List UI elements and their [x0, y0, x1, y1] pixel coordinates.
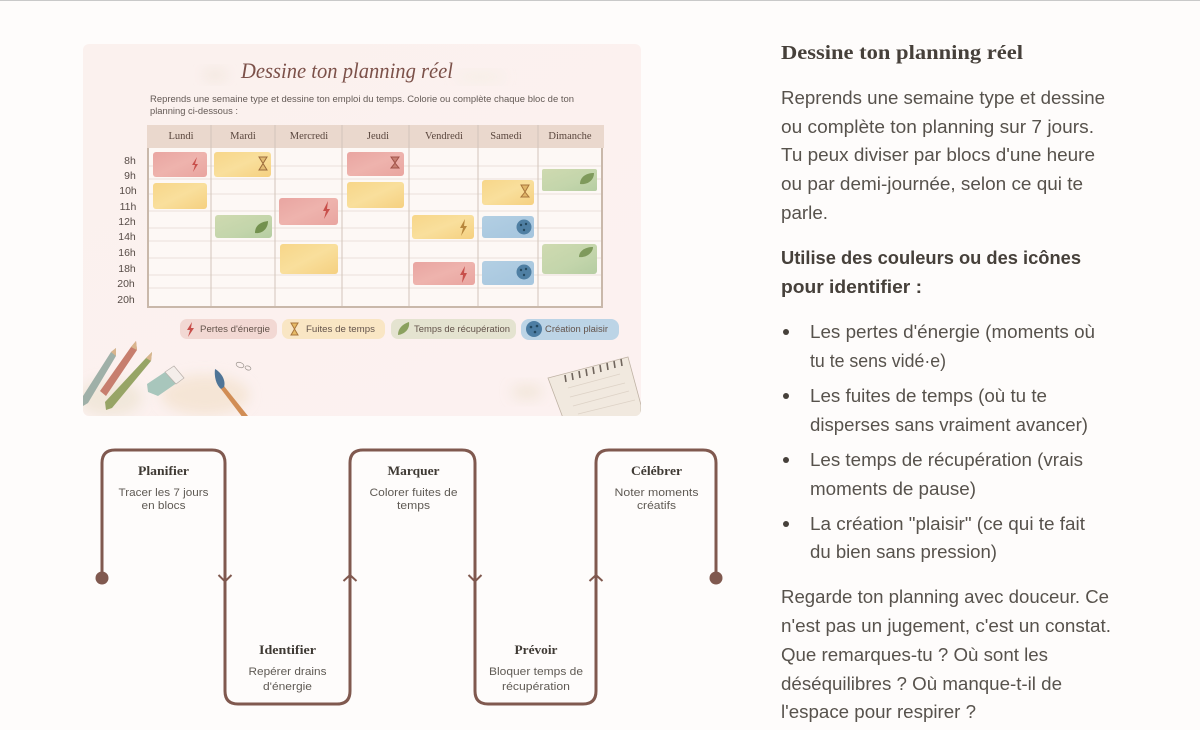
end dot [710, 572, 722, 584]
bullet: pertes d'énergie [783, 321, 1095, 371]
process flow [96, 450, 722, 704]
bullet: temps de récupération: Les temps de récupération (vrais [810, 449, 1083, 470]
step: Prévoir [489, 643, 583, 693]
hour labels: 16h [118, 247, 136, 259]
step: Célébrer: Noter moments [614, 487, 699, 499]
legend: fuites de temps: Fuites de temps [306, 324, 375, 335]
subheading: pour identifier : [781, 276, 922, 297]
closing paragraph: déséquilibres ? Où manque-t-il de [781, 673, 1062, 694]
heading: Dessine ton planning réel [781, 42, 1023, 64]
legend: fuites de temps [282, 319, 385, 339]
step: Marquer: temps [397, 500, 430, 512]
legend: pertes d'énergie [180, 319, 277, 339]
step: Identifier: d'énergie [263, 681, 312, 693]
step: Marquer: Marquer [388, 464, 440, 478]
watercolor stains [78, 69, 543, 416]
icon: coloured pencils [83, 341, 152, 410]
table header: Lundi [168, 131, 194, 142]
intro paragraph: Tu peux diviser par blocs d'une heure [781, 144, 1095, 165]
table header: Mercredi [290, 131, 328, 142]
legend: temps de récupération [391, 319, 516, 339]
illustration instructions [150, 94, 574, 117]
table header: Samedi [490, 131, 522, 142]
bullet: temps de récupération [783, 449, 1083, 499]
step: Identifier: Identifier [259, 643, 317, 657]
bullet: temps de récupération: moments de pause) [810, 478, 976, 499]
table header: Dimanche [548, 131, 592, 142]
step: Prévoir: Bloquer temps de [489, 666, 583, 678]
legend [180, 319, 619, 340]
bullet list [783, 321, 1095, 562]
arrow down [218, 575, 232, 582]
hour labels: 10h [119, 185, 137, 197]
step: Marquer: Colorer fuites de [370, 487, 458, 499]
step: Célébrer: Célébrer [631, 464, 682, 478]
arrow down [468, 575, 482, 582]
hour labels [117, 155, 137, 306]
bullet: fuites de temps [783, 385, 1088, 435]
illustration instructions: Reprends une semaine type et dessine ton emploi du temps. Colorie ou complète chaque bloc de ton [150, 94, 574, 105]
flow line [102, 450, 716, 704]
icon: eraser [147, 366, 184, 396]
hour labels: 14h [118, 231, 136, 243]
arrow up [344, 575, 356, 581]
legend: création plaisir: Création plaisir [545, 324, 609, 335]
icon: spiral notebook [548, 357, 641, 418]
intro paragraph: ou par demi-journée, selon ce qui te [781, 173, 1083, 194]
arrow up [590, 575, 602, 581]
intro paragraph: parle. [781, 202, 828, 223]
coloured blocks [153, 152, 597, 285]
closing paragraph: Regarde ton planning avec douceur. Ce [781, 586, 1109, 607]
weekly table [147, 125, 604, 307]
hour labels: 11h [120, 201, 137, 213]
step: Célébrer: créatifs [637, 500, 676, 512]
icon: small glasses doodle [235, 361, 252, 371]
bullet: création plaisir: du bien sans pression) [810, 541, 997, 562]
hour labels: 18h [118, 263, 136, 275]
step: Célébrer [614, 464, 699, 512]
bullet: fuites de temps: disperses sans vraiment avancer) [810, 414, 1088, 435]
subheading: Utilise des couleurs ou des icônes [781, 247, 1081, 268]
intro paragraph [781, 87, 1105, 223]
closing paragraph [781, 586, 1111, 722]
hour labels: 20h [117, 294, 135, 306]
table header: Mardi [230, 131, 256, 142]
step: Planifier: en blocs [142, 500, 186, 512]
step: Identifier [248, 643, 327, 693]
step: Marquer [370, 464, 458, 512]
bullet: pertes d'énergie: tu te sens vidé·e) [810, 350, 946, 371]
table header [147, 125, 604, 148]
step: Identifier: Repérer drains [248, 666, 327, 678]
step: Planifier [118, 464, 209, 512]
planning illustration [78, 44, 641, 418]
step: Planifier: Planifier [138, 464, 189, 478]
hour labels: 12h [118, 216, 136, 228]
legend: création plaisir [521, 319, 619, 340]
hour labels: 20h [117, 278, 135, 290]
table header: Jeudi [367, 131, 389, 142]
step: Planifier: Tracer les 7 jours [118, 487, 209, 499]
legend: pertes d'énergie: Pertes d'énergie [200, 324, 270, 335]
table header: Vendredi [425, 131, 463, 142]
legend: temps de récupération: Temps de récupération [414, 324, 510, 335]
step: Prévoir: récupération [502, 681, 570, 693]
subheading [781, 247, 1081, 297]
illustration instructions: planning ci-dessous : [150, 106, 238, 117]
start dot [96, 572, 108, 584]
top border [0, 0, 1200, 1]
intro paragraph: Reprends une semaine type et dessine [781, 87, 1105, 108]
bullet: création plaisir [783, 513, 1085, 562]
closing paragraph: n'est pas un jugement, c'est un constat. [781, 615, 1111, 636]
hour labels: 8h [124, 155, 136, 167]
illustration title: Dessine ton planning réel [240, 58, 453, 83]
closing paragraph: Que remarques-tu ? Où sont les [781, 644, 1048, 665]
icon: paint brush [215, 369, 248, 418]
bullet: fuites de temps: Les fuites de temps (où tu te [810, 385, 1047, 406]
intro paragraph: ou complète ton planning sur 7 jours. [781, 116, 1094, 137]
step: Prévoir: Prévoir [514, 643, 558, 657]
bullet: pertes d'énergie: Les pertes d'énergie (moments où [810, 321, 1095, 342]
bullet: création plaisir: La création "plaisir" (ce qui te fait [810, 513, 1085, 534]
closing paragraph: l'espace pour respirer ? [781, 701, 976, 722]
hour labels: 9h [124, 170, 136, 182]
